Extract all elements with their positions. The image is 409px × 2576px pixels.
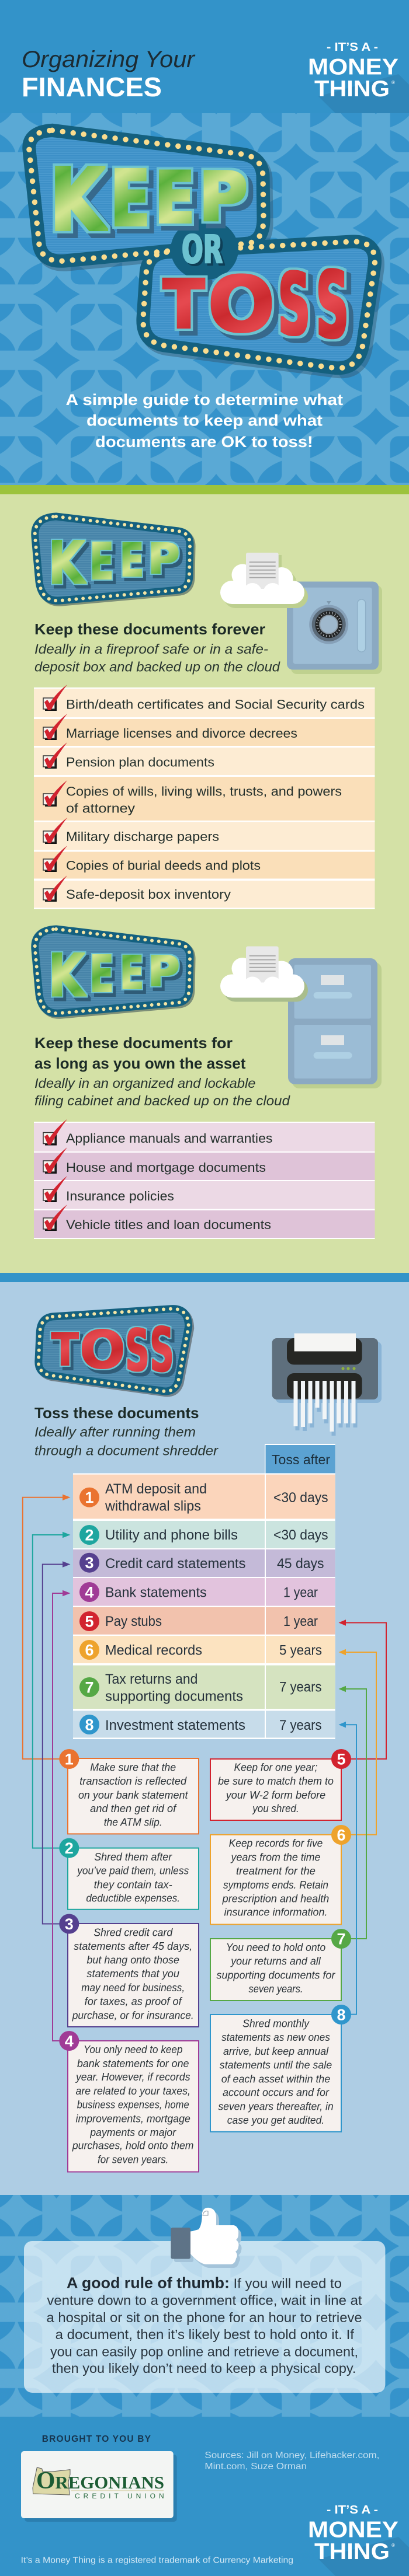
panel: rule of thumb: you can easily pop online and retrieve a document,: [50, 2344, 358, 2359]
note 4: are related to your taxes,: [76, 2085, 190, 2097]
row 8: 8: [85, 1716, 94, 1733]
row: safe-deposit inventory: Safe-deposit box inventory: [66, 887, 231, 902]
panel: rule of thumb: venture down to a government office, wait in line at: [47, 2292, 362, 2308]
note 4: payments or major: [89, 2127, 176, 2138]
row 3: 3: [85, 1554, 94, 1572]
header band: [0, 0, 409, 113]
logo: It's a Money Thing: [308, 41, 409, 113]
note 6: insurance information.: [224, 1906, 327, 1918]
heading: keep forever: deposit box and backed up on the cloud: [34, 659, 280, 675]
note 5: [210, 1749, 351, 1820]
heading: keep forever: Keep these documents forever: [34, 620, 265, 638]
table header: Toss after: [272, 1452, 330, 1467]
note 7: [210, 1929, 351, 2001]
row: house documents: [34, 1147, 375, 1180]
row 3: Credit card statements: [105, 1556, 245, 1572]
logo: It's a Money Thing: ®: [391, 80, 395, 85]
note 4: 4: [65, 2032, 74, 2050]
checklist: keep forever: [34, 685, 375, 909]
note 3: [59, 1914, 199, 2027]
arrow 1: [23, 1494, 70, 1759]
small keep sign 2: [35, 929, 192, 1015]
row 2: <30 days: [273, 1527, 328, 1543]
row 8: [73, 1711, 335, 1738]
note 6: treatment for the: [236, 1865, 316, 1877]
row 7: 7 years: [279, 1680, 321, 1695]
note 3: 3: [65, 1915, 74, 1933]
note 3: statements that you: [86, 1968, 179, 1980]
row 1: withdrawal slips: [105, 1499, 201, 1514]
row: pension: [34, 742, 375, 775]
panel: footer: [0, 2417, 409, 2576]
arrow 3: [43, 1561, 70, 1924]
panel: rule of thumb: a hospital or sit on the phone for an hour to retrieve: [47, 2310, 362, 2325]
row: military: Military discharge papers: [66, 829, 219, 844]
note 8: Shred monthly: [242, 2017, 310, 2029]
small keep sign 2: E: [120, 947, 144, 1000]
note 1: Make sure that the: [90, 1761, 176, 1773]
connector arrows: [23, 1494, 386, 2041]
row: appliance manuals: [34, 1119, 375, 1151]
note 8: account occurs and for: [223, 2087, 330, 2099]
table: toss after: [73, 1444, 335, 1739]
or badge: [171, 219, 238, 280]
note 8: [210, 2005, 351, 2132]
sources: [204, 2451, 379, 2472]
sources: Mint.com, Suze Orman: [204, 2462, 307, 2472]
small toss sign: S: [150, 1315, 174, 1385]
note 3: but hang onto those: [86, 1954, 179, 1966]
row 5: [73, 1607, 335, 1635]
row 1: [73, 1475, 335, 1519]
row 1: 1: [85, 1489, 94, 1506]
note 6: prescription and health: [222, 1893, 329, 1905]
small keep sign 1: [35, 516, 192, 602]
note 4: bank statements for one: [77, 2058, 189, 2069]
arrow 8: [339, 1722, 356, 2015]
keep frame: [29, 130, 266, 264]
logo: It's a Money Thing: - IT’S A -: [327, 41, 378, 54]
arrow 7: [339, 1686, 366, 1939]
word: toss: S: [278, 256, 310, 354]
row 6: [73, 1636, 335, 1663]
row: vehicle titles: Vehicle titles and loan documents: [66, 1217, 271, 1232]
heading: keep while you own the asset: Ideally in an organized and lockable: [34, 1076, 256, 1091]
note 6: [210, 1825, 351, 1925]
note 3: purchase, or for insurance.: [72, 2009, 194, 2021]
checklist: keep while owning: [34, 1119, 375, 1239]
note 8: statements until the sale: [220, 2060, 332, 2071]
note 7: 7: [337, 1931, 346, 1948]
note 4: business expenses, home: [77, 2099, 189, 2111]
word: keep: P: [199, 158, 248, 236]
note 8: seven years thereafter, in: [218, 2101, 334, 2113]
row: marriage licenses: [34, 714, 375, 746]
small keep sign 2: E: [89, 945, 114, 1004]
heading: keep forever: Ideally in a fireproof safe or in a safe-: [34, 641, 268, 657]
row 7: [73, 1666, 335, 1709]
row: insurance: Insurance policies: [66, 1189, 174, 1203]
word: toss: O: [208, 260, 275, 349]
footer logo: It's a Money Thing: MONEY: [308, 2518, 398, 2542]
heading: keep forever: [34, 620, 280, 675]
note 4: You only need to keep: [84, 2044, 182, 2055]
small keep sign 2: K: [48, 941, 86, 1010]
row: burial deeds: Copies of burial deeds and plots: [66, 858, 261, 873]
or badge: OR: [182, 227, 223, 272]
note 2: they contain tax-: [94, 1879, 172, 1890]
footer logo: It's a Money Thing: - IT’S A -: [327, 2504, 378, 2516]
note 6: Keep records for five: [229, 1838, 323, 1849]
small toss sign: S: [126, 1318, 150, 1384]
heading: keep while you own the asset: filing cabinet and backed up on the cloud: [34, 1093, 290, 1108]
row 4: 1 year: [283, 1585, 318, 1600]
brought to you by label: BROUGHT TO YOU BY: [42, 2434, 151, 2444]
note 8: case you get audited.: [227, 2114, 324, 2126]
note 4: year. However, if records: [75, 2071, 190, 2083]
note 7: seven years.: [249, 1983, 303, 1995]
note 3: statements after 45 days,: [74, 1940, 192, 1952]
note 6: symptoms ends. Retain: [223, 1879, 328, 1891]
patterned rule of thumb background: [0, 2195, 409, 2417]
note 1: transaction is reflected: [79, 1775, 187, 1787]
note 1: 1: [65, 1751, 74, 1768]
row: vehicle titles: [34, 1205, 375, 1238]
row: appliance manuals: Appliance manuals and warranties: [66, 1131, 272, 1146]
note 2: 2: [65, 1839, 74, 1857]
panel: rule of thumb: If you will need to: [234, 2276, 342, 2291]
row: military: [34, 818, 375, 850]
word: toss: T: [163, 266, 204, 343]
row 4: Bank statements: [105, 1585, 207, 1600]
footer logo: It's a Money Thing: [308, 2504, 409, 2576]
note 8: arrive, but keep annual: [223, 2046, 329, 2057]
row 7: supporting documents: [105, 1689, 243, 1704]
row: wills: [34, 777, 375, 821]
row: birth certificates: [34, 685, 375, 717]
word: keep: E: [155, 157, 195, 239]
note 7: your returns and all: [230, 1955, 321, 1967]
heading: toss: through a document shredder: [34, 1443, 219, 1458]
word: keep: K: [50, 150, 108, 250]
note 1: and then get rid of: [90, 1803, 177, 1814]
row: pension: Pension plan documents: [66, 755, 214, 769]
icon: filing cabinet with cloud: [220, 947, 382, 1088]
heading: toss: Toss these documents: [34, 1404, 199, 1422]
toss frame: [143, 242, 377, 372]
icon: shredder: [272, 1334, 382, 1436]
note 4: [59, 2031, 199, 2172]
row 3: 45 days: [277, 1556, 324, 1572]
header title: FINANCES: [22, 72, 162, 102]
note 7: You need to hold onto: [226, 1942, 325, 1953]
sign: keep or toss: S: [316, 252, 348, 358]
intro text: A simple guide to determine what: [65, 391, 343, 409]
small keep sign 1: P: [148, 535, 180, 583]
header title: [22, 47, 196, 102]
icon: cloud and document with safe: [220, 553, 382, 674]
panel: rule of thumb: [24, 2241, 385, 2393]
note 2: deductible expenses.: [86, 1893, 180, 1904]
intro text: documents are OK to toss!: [95, 433, 313, 451]
row: burial deeds: [34, 846, 375, 879]
heading: keep while you own the asset: as long as you own the asset: [34, 1055, 246, 1072]
note 2: you’ve paid them, unless: [76, 1865, 189, 1877]
note 8: 8: [337, 2006, 346, 2024]
row 8: 7 years: [279, 1718, 321, 1733]
note 5: you shred.: [251, 1803, 299, 1814]
arrow 6: [339, 1649, 376, 1835]
row 5: 5: [85, 1613, 94, 1631]
note 2: [59, 1838, 199, 1910]
note 4: for seven years.: [98, 2154, 168, 2166]
footer logo: It's a Money Thing: ®: [391, 2543, 395, 2548]
row 7: Tax returns and: [105, 1671, 197, 1687]
header title: Organizing Your: [22, 47, 196, 72]
note 2: Shred them after: [94, 1851, 172, 1863]
logo: It's a Money Thing: MONEY: [308, 55, 398, 79]
trademark line: It’s a Money Thing is a registered trademark of Currency Marketing: [21, 2556, 293, 2565]
logo: It's a Money Thing: THING: [314, 76, 390, 102]
heading: toss: Ideally after running them: [34, 1424, 196, 1439]
heading: keep while you own the asset: Keep these documents for: [34, 1034, 233, 1052]
arrow 5: [339, 1619, 386, 1759]
note 5: be sure to match them to: [218, 1775, 334, 1787]
row: house documents: House and mortgage documents: [66, 1160, 266, 1175]
note 4: purchases, hold onto them: [72, 2140, 194, 2152]
intro text: [65, 391, 343, 451]
row 5: 1 year: [283, 1614, 318, 1629]
row 4: [73, 1578, 335, 1606]
arrow 4: [53, 1590, 70, 2041]
row: safe-deposit inventory: [34, 875, 375, 908]
panel: rule of thumb: a document, then it’s likely best to hold onto it. If: [56, 2327, 355, 2342]
row 6: 5 years: [279, 1643, 322, 1659]
note 5: Keep for one year;: [234, 1761, 318, 1773]
small toss sign: [39, 1309, 190, 1393]
row 6: 6: [85, 1641, 94, 1659]
row 2: Utility and phone bills: [105, 1527, 238, 1543]
row 1: <30 days: [273, 1490, 328, 1506]
note 1: the ATM slip.: [104, 1816, 162, 1828]
row 5: Pay stubs: [105, 1614, 162, 1629]
patterned hero background: [0, 113, 409, 485]
small keep sign 1: E: [120, 535, 144, 587]
row 6: Medical records: [105, 1643, 202, 1659]
small keep sign 1: E: [89, 533, 114, 591]
sponsor card: Oregonians Credit Union: CREDIT UNION: [75, 2492, 164, 2500]
small toss sign: T: [51, 1324, 79, 1376]
panel: keep section: [0, 485, 409, 1273]
row 1: ATM deposit and: [105, 1481, 207, 1497]
note 1: on your bank statement: [78, 1789, 188, 1801]
heading: keep while you own the asset: [34, 1034, 290, 1108]
row 4: 4: [85, 1584, 94, 1601]
row: wills: of attorney: [66, 801, 135, 816]
small toss sign: O: [79, 1320, 125, 1380]
note 3: Shred credit card: [93, 1926, 173, 1938]
row 3: [73, 1549, 335, 1577]
row 2: 2: [85, 1527, 94, 1544]
note 5: 5: [337, 1751, 346, 1768]
panel: toss section: [0, 1273, 409, 2195]
icon: thumbs up: [171, 2208, 242, 2268]
note 5: your W-2 form before: [225, 1789, 325, 1801]
row 8: Investment statements: [105, 1718, 245, 1733]
note 6: 6: [337, 1827, 346, 1844]
note 3: for taxes, as proof of: [85, 1996, 183, 2008]
arrow 2: [33, 1532, 70, 1848]
row 7: 7: [85, 1678, 94, 1696]
sign: keep or toss: [29, 130, 377, 372]
sources: Sources: Jill on Money, Lifehacker.com,: [204, 2451, 379, 2460]
note 1: [59, 1749, 199, 1834]
footer logo: It's a Money Thing: THING: [314, 2539, 390, 2564]
note 3: may need for business,: [81, 1982, 185, 1994]
row: birth certificates: Birth/death certificates and Social Security cards: [66, 697, 365, 712]
panel: rule of thumb: then you likely don’t need to keep a physical copy.: [52, 2361, 356, 2376]
note 6: years from the time: [230, 1851, 320, 1863]
row: wills: Copies of wills, living wills, trusts, and powers: [66, 784, 342, 798]
panel: rule of thumb: A good rule of thumb:: [67, 2274, 230, 2292]
marquee lights: [29, 130, 375, 368]
note 8: statements as new ones: [221, 2032, 330, 2043]
small keep sign 2: P: [148, 947, 180, 996]
note 4: improvements, mortgage: [76, 2113, 190, 2124]
small keep sign 1: K: [48, 528, 86, 597]
intro text: documents to keep and what: [86, 412, 323, 430]
row 2: [73, 1521, 335, 1548]
row: insurance: [34, 1176, 375, 1209]
table header: [265, 1445, 335, 1473]
word: keep: E: [110, 154, 150, 244]
sponsor card: Oregonians Credit Union: OREGONIANS: [36, 2467, 164, 2494]
heading: toss: [34, 1404, 219, 1458]
note 8: of each asset within the: [221, 2073, 330, 2085]
note 7: supporting documents for: [216, 1969, 335, 1981]
sponsor card: Oregonians Credit Union: [21, 2451, 177, 2522]
row: marriage licenses: Marriage licenses and divorce decrees: [66, 726, 297, 741]
